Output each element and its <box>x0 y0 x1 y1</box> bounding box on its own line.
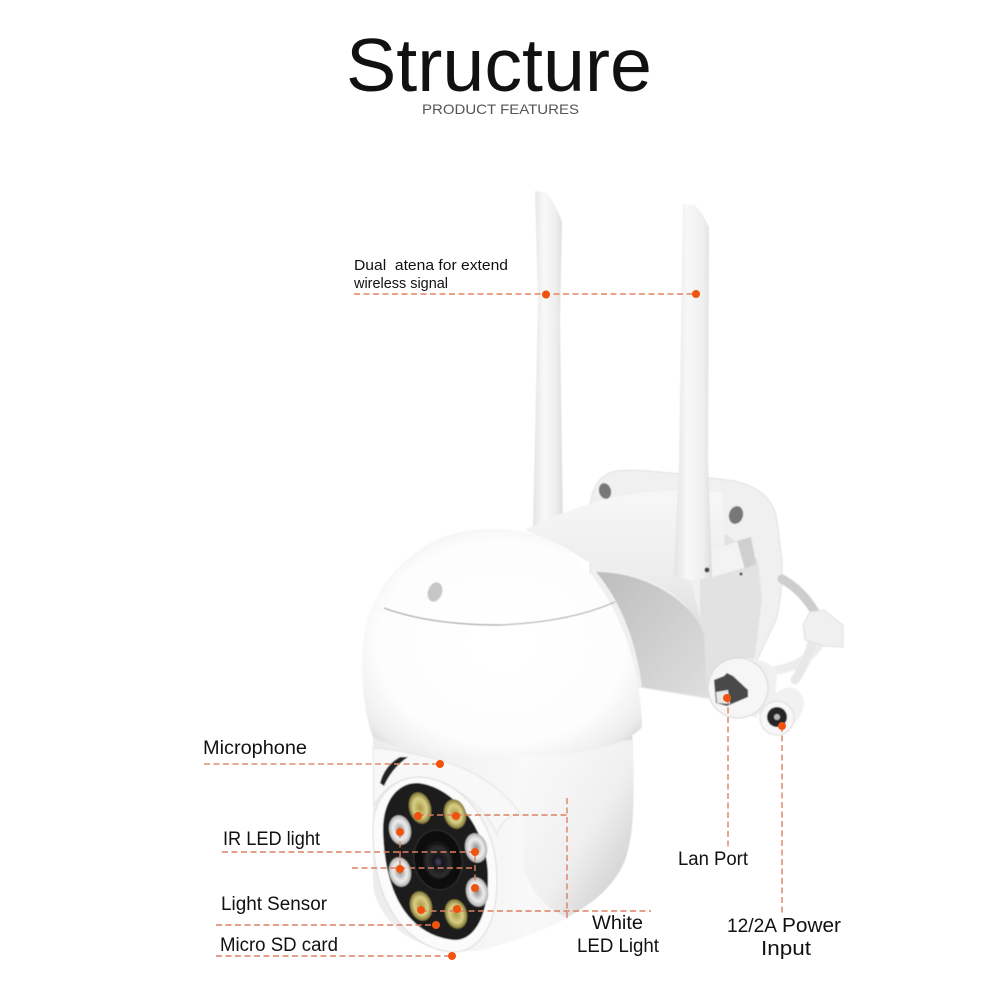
upper band around the face <box>373 748 520 835</box>
DC power jack <box>758 680 812 736</box>
title: Structure <box>346 23 652 107</box>
callout: IR LED light <box>222 828 479 892</box>
callout: LAN port: Lan Port <box>678 849 749 870</box>
callout: microphone: Microphone <box>203 738 307 759</box>
callout: power input: 12/2A <box>727 916 777 937</box>
face ring <box>373 777 497 952</box>
shaded underside of arm <box>596 572 707 697</box>
dome hole <box>425 580 445 604</box>
RJ45 LAN connector <box>701 651 777 725</box>
callout: power input <box>727 722 841 960</box>
right antenna <box>674 204 712 580</box>
callout: antenna <box>353 257 700 298</box>
subtitle: PRODUCT FEATURES <box>422 101 579 117</box>
mounting holes <box>597 482 745 526</box>
left antenna <box>533 191 563 530</box>
camera illustration <box>362 191 843 952</box>
white LEDs <box>405 790 471 931</box>
side panel <box>520 740 634 917</box>
callout: white LED light: White <box>592 913 643 934</box>
callout: power input: Power <box>782 915 841 937</box>
lens <box>409 826 467 894</box>
callout: microphone <box>203 738 444 768</box>
dome <box>362 529 642 757</box>
callout: light sensor <box>216 894 440 929</box>
callout: antenna: wireless signal <box>353 275 448 292</box>
antenna connector <box>712 537 756 577</box>
cable junction <box>803 610 843 647</box>
callout: LAN port <box>678 694 749 870</box>
callout: micro SD card <box>216 935 456 960</box>
callout: antenna: Dual atena for extend <box>354 257 508 274</box>
arm <box>525 491 726 634</box>
IR LEDs <box>386 813 491 909</box>
wall mount plate <box>590 470 782 700</box>
callout: IR LED light: IR LED light <box>223 829 321 850</box>
cables <box>777 579 822 680</box>
lower ball housing <box>373 730 634 952</box>
callout: power input: Input <box>761 938 811 960</box>
microphone slot <box>380 757 408 786</box>
callout: light sensor: Light Sensor <box>221 894 328 915</box>
callout: white LED light <box>414 798 660 957</box>
face dark panel <box>383 783 488 940</box>
recessed plate panel <box>700 530 762 700</box>
callout: white LED light: LED Light <box>577 936 660 957</box>
dome seam <box>384 602 615 625</box>
callout: micro SD card: Micro SD card <box>220 935 338 956</box>
